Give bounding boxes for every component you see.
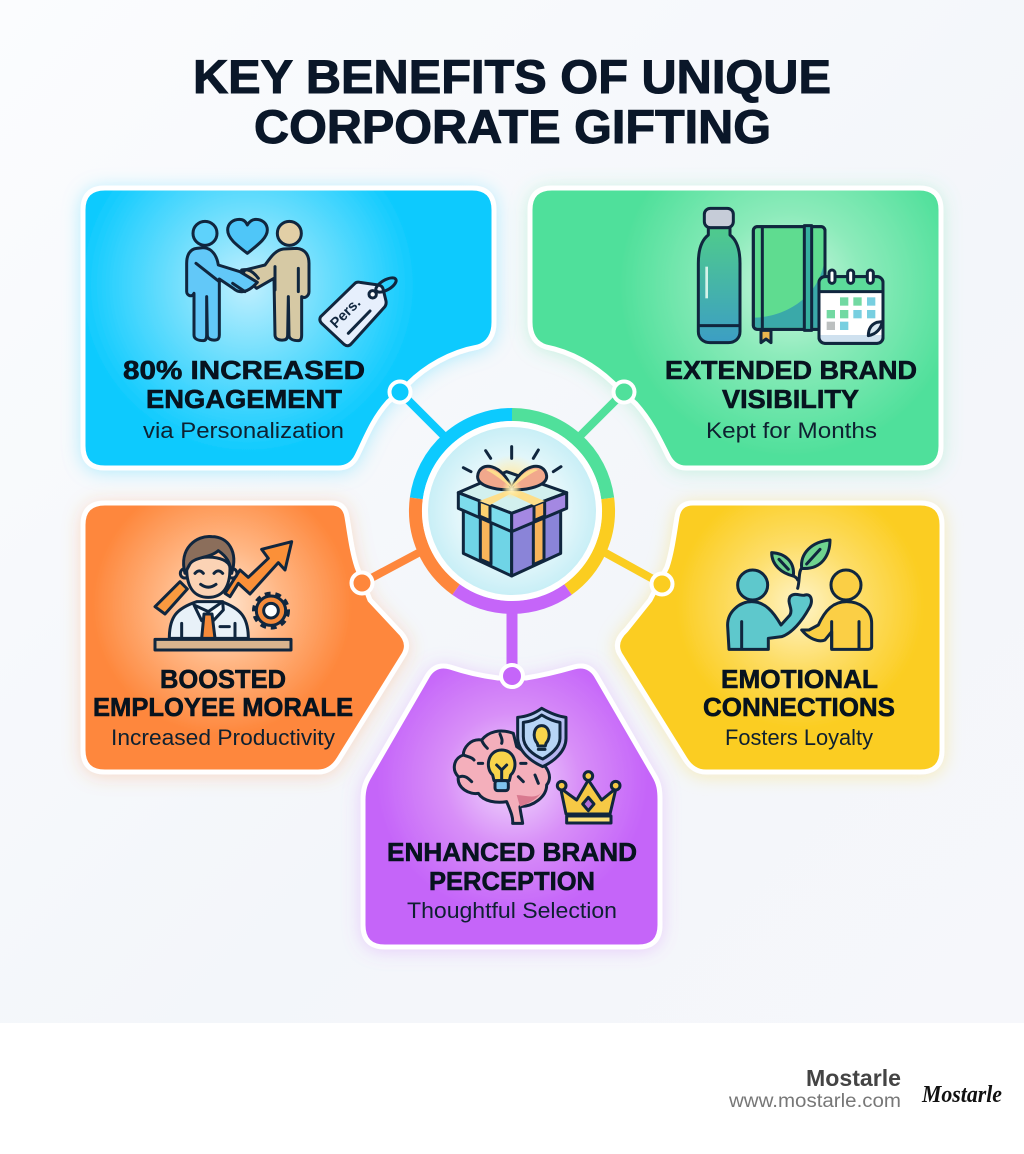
icon: employee with growth arrow and gear [155, 537, 292, 650]
icon: brain, shield and crown [454, 708, 620, 823]
connector: yellow [602, 551, 672, 594]
panel: emotional connections [617, 503, 942, 772]
connector: purple [501, 608, 523, 687]
subtext: Thoughtful Selection [407, 898, 617, 923]
icon: handshake and tag [187, 219, 398, 346]
panel: extended brand visibility [530, 188, 941, 468]
footer [0, 1023, 1024, 1154]
icon: bottle, notebook, calendar [698, 208, 883, 343]
heading: BOOSTED [160, 664, 286, 694]
heading line 2: PERCEPTION [429, 866, 595, 896]
panel: enhanced brand perception [363, 666, 660, 947]
subtext: via Personalization [143, 418, 344, 443]
heading line 2: ENGAGEMENT [146, 384, 342, 414]
title: KEY BENEFITS OF UNIQUE [193, 50, 831, 103]
icon: gift box [458, 447, 567, 576]
heading: ENHANCED BRAND [387, 837, 637, 867]
heading: EMOTIONAL [721, 664, 878, 694]
heading line 2: VISIBILITY [722, 384, 859, 414]
title [193, 50, 831, 153]
heading line 2: CONNECTIONS [703, 692, 895, 722]
footer url: www.mostarle.com [728, 1091, 901, 1112]
icon: handshake and tag: Pers. [328, 295, 364, 332]
heading: EXTENDED BRAND [665, 355, 917, 385]
title: CORPORATE GIFTING [254, 100, 771, 153]
panel: 80% increased engagement [83, 188, 494, 468]
connector: orange [352, 551, 422, 594]
central hub ring [415, 414, 609, 607]
connector: blue [390, 382, 446, 438]
connector: green [578, 382, 634, 438]
heading line 2: EMPLOYEE MORALE [93, 692, 353, 722]
subtext: Fosters Loyalty [725, 725, 874, 750]
footer brand name: Mostarle [806, 1065, 901, 1091]
heading: 80% INCREASED [123, 355, 365, 385]
icon: two people with plant [728, 540, 872, 649]
footer logo: Mostarle [921, 1082, 1002, 1108]
panel: boosted employee morale [83, 503, 407, 772]
subtext: Kept for Months [706, 418, 877, 443]
subtext: Increased Productivity [111, 725, 336, 750]
